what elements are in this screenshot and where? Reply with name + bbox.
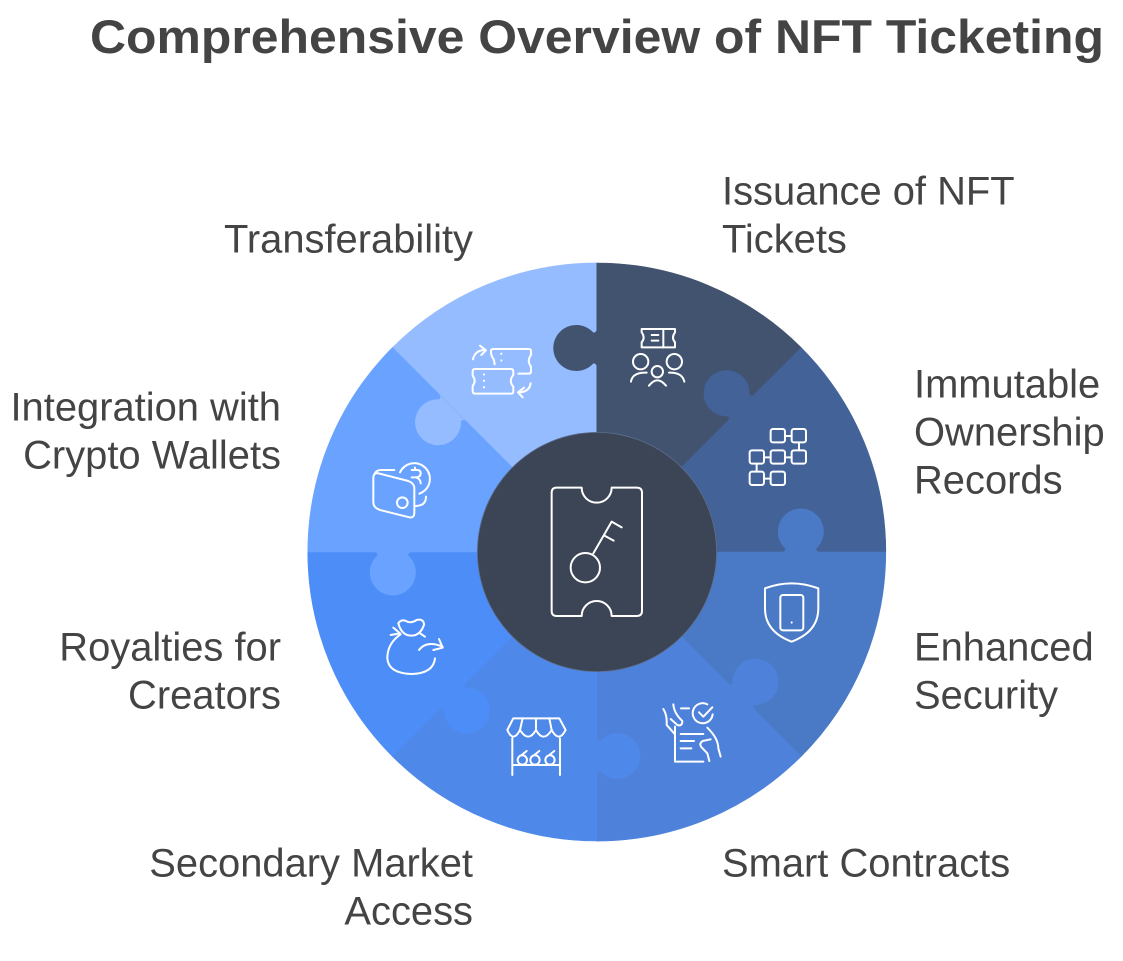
icon: wallet with coin: [373, 463, 430, 517]
label: secondary market access: Secondary Market: [149, 842, 473, 886]
label: issuance of NFT tickets: Issuance of NFT: [722, 170, 1015, 214]
panel: transferability segment: [392, 203, 741, 552]
icon: ticket with key: [552, 488, 642, 616]
label: immutable ownership records: Records: [914, 459, 1063, 503]
puzzle knob: secondary market: [597, 733, 640, 779]
icon: hands with contract: [663, 703, 721, 762]
center hub: [477, 432, 717, 672]
panel: immutable ownership records segment: [597, 348, 946, 697]
label: integration with crypto wallets: Crypto Wallets: [23, 434, 281, 478]
label: royalties for creators: Creators: [128, 674, 281, 718]
puzzle knob: transferability: [406, 391, 469, 455]
panel: issuance of NFT tickets segment: [553, 263, 801, 552]
puzzle knob: smart contracts: [725, 649, 788, 713]
puzzle knob: royalties: [436, 680, 500, 743]
label: integration with crypto wallets: Integration with: [10, 386, 281, 430]
label: integration with crypto wallets: [10, 386, 281, 478]
label: immutable ownership records: Immutable: [914, 363, 1100, 407]
icon: shield with phone: [765, 583, 818, 642]
icon: market stall: [507, 718, 566, 775]
puzzle knob: enhanced security: [778, 509, 824, 552]
panel: smart contracts segment: [452, 552, 801, 901]
icon: ticket and people: [631, 329, 684, 386]
panel: enhanced security segment: [597, 509, 886, 756]
puzzle knob: issuance: [553, 325, 597, 371]
label: royalties for creators: Royalties for: [59, 626, 281, 670]
icon: swapping tickets: [473, 346, 531, 397]
icon: linked blocks: [750, 429, 806, 485]
label: enhanced security: [914, 626, 1094, 718]
label: royalties for creators: [59, 626, 281, 718]
label: immutable ownership records: [914, 363, 1105, 503]
title: Comprehensive Overview of NFT Ticketing: [90, 10, 1104, 63]
label: secondary market access: [149, 842, 473, 934]
icon: money bag with arrow: [387, 620, 443, 674]
label: enhanced security: Enhanced: [914, 626, 1094, 670]
label: immutable ownership records: Ownership: [914, 411, 1105, 455]
label: issuance of NFT tickets: [722, 170, 1015, 262]
label: secondary market access: Access: [344, 890, 473, 934]
label: issuance of NFT tickets: Tickets: [722, 218, 847, 262]
panel: secondary market access segment: [392, 552, 640, 841]
label: transferability: Transferability: [224, 218, 473, 262]
label: enhanced security: Security: [914, 674, 1058, 718]
panel: integration with crypto wallets segment: [308, 348, 597, 595]
panel: royalties for creators segment: [248, 407, 597, 756]
puzzle knob: immutable records: [694, 361, 757, 424]
puzzle knob: crypto wallets: [370, 552, 416, 595]
label: smart contracts: Smart Contracts: [722, 842, 1010, 886]
